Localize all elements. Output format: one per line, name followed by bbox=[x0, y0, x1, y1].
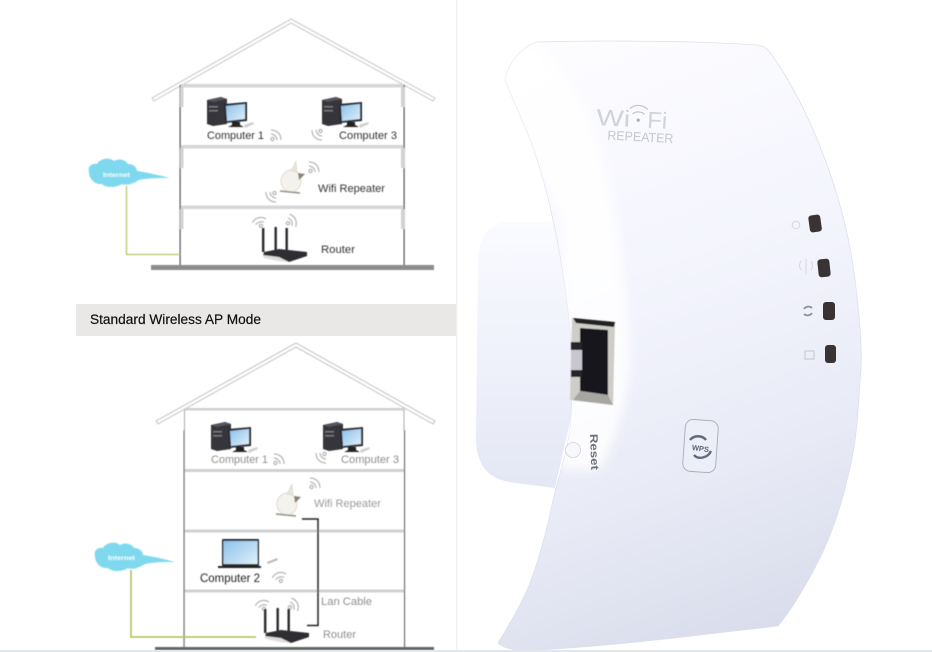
icon: computer 1 bbox=[207, 97, 254, 128]
label: lan cable: Lan Cable bbox=[321, 596, 372, 608]
ethernet port bbox=[570, 318, 615, 405]
label: wifi repeater: Wifi Repeater bbox=[314, 498, 381, 510]
internet cable bbox=[126, 186, 180, 254]
logo wordmark: wi fi: Wi bbox=[596, 104, 631, 132]
wps button bbox=[682, 419, 719, 473]
label: router: Router bbox=[323, 629, 356, 641]
icon: wifi repeater bbox=[276, 484, 301, 516]
panel: wifi repeater mode diagram bbox=[89, 19, 435, 270]
label: computer 1: Computer 1 bbox=[207, 130, 264, 142]
label: wps: WPS bbox=[691, 443, 710, 454]
ground bar bbox=[151, 265, 434, 270]
led: lan bbox=[805, 345, 836, 363]
label: computer 2: Computer 2 bbox=[200, 573, 260, 585]
icon: internet cloud bbox=[89, 159, 170, 187]
icon: computer 3 bbox=[323, 422, 370, 453]
led: wps sync bbox=[804, 302, 835, 320]
label: router: Router bbox=[321, 244, 355, 256]
heading: standard wireless AP mode: Standard Wireless AP Mode bbox=[90, 312, 261, 327]
house walls and floors bbox=[180, 84, 405, 265]
logo: wi-fi repeater bbox=[595, 103, 675, 146]
icon: wireless signals bbox=[255, 452, 326, 612]
page bottom edge bbox=[0, 650, 932, 652]
ground bar bbox=[155, 647, 434, 650]
label: computer 1: Computer 1 bbox=[211, 454, 268, 466]
label: computer 3: Computer 3 bbox=[339, 130, 397, 142]
icon: wifi repeater bbox=[280, 161, 305, 193]
section heading band bbox=[76, 304, 456, 336]
house walls and floors bbox=[184, 408, 405, 648]
label: computer 3: Computer 3 bbox=[341, 454, 399, 466]
icon: computer 3 bbox=[322, 97, 369, 128]
icon: computer 1 bbox=[211, 422, 258, 453]
icon: laptop computer 2 bbox=[218, 539, 278, 568]
house roof bbox=[152, 19, 435, 101]
reset button bbox=[566, 442, 580, 458]
wall plug block bbox=[476, 222, 575, 488]
label: wifi repeater: Wifi Repeater bbox=[318, 183, 385, 195]
logo: wi-fi repeater: Fi bbox=[647, 107, 668, 134]
icon: internet cloud bbox=[95, 543, 175, 571]
led: power bbox=[792, 214, 822, 233]
lan cable line bbox=[302, 519, 318, 626]
device body bbox=[498, 41, 861, 650]
icon: router bbox=[262, 227, 307, 262]
internet cable bbox=[131, 570, 256, 637]
label: internet: Internet bbox=[103, 172, 131, 179]
panel: wifi repeater product bbox=[476, 35, 861, 650]
led: wireless bbox=[800, 258, 831, 278]
logo wifi arcs bbox=[629, 105, 648, 122]
label: reset: Reset bbox=[587, 434, 600, 470]
panel: standard wireless AP mode diagram bbox=[95, 343, 435, 650]
label: internet: Internet bbox=[108, 555, 136, 562]
status leds and icons bbox=[792, 214, 836, 363]
logo text: repeater: REPEATER bbox=[607, 128, 674, 146]
icon: router bbox=[264, 608, 309, 643]
house roof bbox=[156, 343, 435, 424]
panel divider bbox=[456, 0, 457, 650]
icon: wireless signals bbox=[252, 129, 322, 228]
wps arrows bbox=[690, 436, 711, 458]
device side highlight band bbox=[495, 35, 630, 470]
